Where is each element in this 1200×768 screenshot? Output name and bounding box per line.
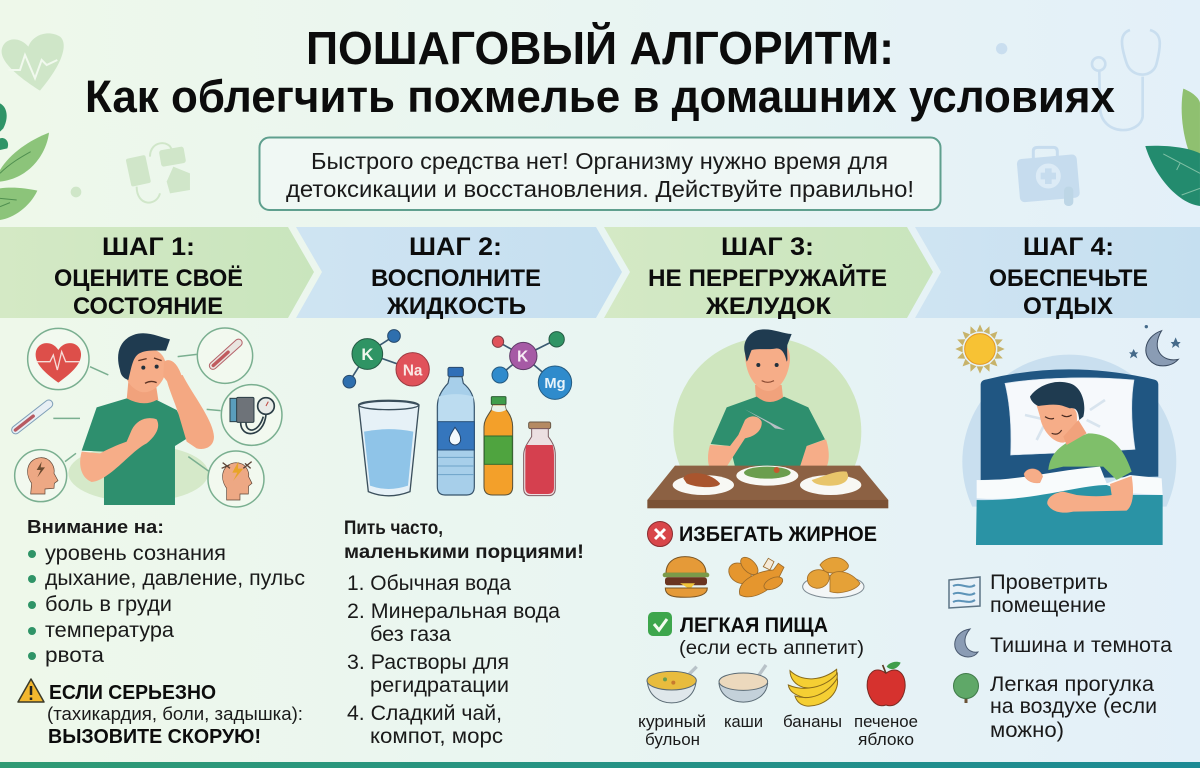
text: quiet and dark: Тишина и темнота [990, 634, 1172, 657]
icons: fatty foods [663, 554, 864, 598]
list: attention points: рвота [45, 644, 104, 667]
icon: molecule K Mg: K [517, 349, 528, 366]
heading: light food: ЛЕГКАЯ ПИЩА [680, 613, 828, 637]
drinking instructions: Пить часто, [344, 518, 443, 539]
table [647, 466, 888, 500]
text: light walk [990, 673, 1157, 742]
list: drinks: 4. Сладкий чай, [347, 702, 502, 725]
callout: Быстрого средства нет! Организму нужно время для [311, 148, 888, 174]
illustration: electrolytes and drinks [343, 330, 572, 496]
ribbon: step 4 [915, 227, 1200, 320]
heading: light food: (если есть аппетит) [679, 637, 864, 659]
list: attention points: уровень сознания [45, 542, 226, 565]
icon: faint first aid kit [1017, 147, 1080, 206]
ribbon: step 1 [0, 227, 314, 320]
icon: check mark [648, 612, 672, 636]
icon: large water bottle [437, 367, 474, 495]
drinking instructions: маленькими порциями! [344, 542, 584, 563]
icon: head left [15, 450, 67, 502]
ribbon: step 1: ОЦЕНИТЕ СВОЁ [54, 265, 243, 292]
porridge [719, 665, 768, 702]
icon: avoid cross [648, 522, 672, 546]
drinking instructions [344, 518, 584, 563]
warning text: (тахикардия, боли, задышка): [47, 704, 303, 724]
ribbon: step 2 [296, 227, 622, 320]
ribbon: step 3: НЕ ПЕРЕГРУЖАЙТЕ [648, 264, 887, 292]
text: light walk: Легкая прогулка [990, 673, 1154, 696]
food labels: куриный [638, 712, 706, 731]
icon: molecule K Mg: Mg [544, 376, 566, 392]
warning text: ВЫЗОВИТЕ СКОРУЮ! [48, 726, 261, 748]
ribbon: step 1: СОСТОЯНИЕ [73, 293, 223, 320]
bananas [788, 669, 838, 706]
icon: faint stethoscope [996, 30, 1160, 130]
icon: faint heart with pulse [2, 33, 64, 91]
list: drinks [347, 572, 560, 748]
text: ventilate: помещение [990, 594, 1106, 617]
text: ventilate: Проветрить [990, 571, 1108, 594]
food labels: бананы [783, 712, 842, 731]
icon: right leaves [1145, 89, 1200, 206]
food labels: яблоко [858, 730, 914, 749]
food labels: каши [724, 712, 763, 731]
list: drinks: 2. Минеральная вода [347, 600, 560, 623]
text: ventilate [990, 571, 1108, 617]
burger [663, 557, 709, 597]
title: ПОШАГОВЫЙ АЛГОРИТМ: [306, 22, 894, 74]
list: drinks: регидратации [370, 674, 509, 697]
plates [673, 475, 734, 495]
list: attention points: дыхание, давление, пульс [45, 567, 305, 590]
heading: avoid fatty food: ИЗБЕГАТЬ ЖИРНОЕ [679, 522, 877, 546]
icon: crescent moon [955, 629, 978, 657]
apple [867, 662, 905, 706]
icon: blood pressure cuff [221, 385, 282, 445]
list: attention points [27, 516, 305, 667]
ribbon: step 2: ВОСПОЛНИТЕ [371, 265, 541, 292]
ribbon: step 4: ОБЕСПЕЧЬТЕ [989, 265, 1148, 292]
icon: thermometer [197, 328, 253, 383]
icon: fresh air window [949, 577, 980, 608]
icon: molecule K Na [343, 330, 429, 388]
icon: warning triangle [18, 679, 44, 702]
icon: faint blood pressure monitor [126, 143, 190, 203]
fried nuggets [803, 557, 864, 598]
heading: light food [679, 613, 864, 659]
illustration: man eating at table [647, 329, 888, 526]
warning text [47, 682, 303, 748]
footer band [0, 762, 1200, 768]
ribbon: step 3: ЖЕЛУДОК [705, 293, 831, 320]
list: attention points: боль в груди [45, 593, 172, 616]
list: drinks: без газа [370, 623, 451, 646]
list: drinks: 3. Растворы для [347, 651, 509, 674]
icon: left leaves [0, 103, 81, 220]
icon: thermometer left [10, 398, 54, 435]
food labels: бульон [645, 730, 700, 749]
icon: sun [955, 324, 1005, 374]
ribbon: step 2: ЖИДКОСТЬ [386, 293, 526, 320]
list: drinks: 1. Обычная вода [347, 572, 511, 595]
ribbon: step 3: ШАГ 3: [721, 233, 814, 261]
icon: glass of water [359, 400, 419, 496]
ribbon: step 1: ШАГ 1: [102, 233, 195, 261]
ribbon: step 2: ШАГ 2: [409, 233, 502, 261]
chicken [725, 554, 785, 597]
ribbon: step 3 [604, 227, 933, 320]
icon: moon and stars [1129, 325, 1181, 366]
icon: tree [954, 674, 978, 703]
warning text: ЕСЛИ СЕРЬЕЗНО [49, 682, 216, 704]
callout: детоксикации и восстановления. Действуйте правильно! [286, 176, 914, 202]
food labels [638, 712, 918, 749]
icon: molecule K Mg [492, 332, 572, 399]
list: attention points: Внимание на: [27, 516, 164, 537]
food labels: печеное [854, 712, 918, 731]
icon: molecule K Na: Na [403, 362, 423, 379]
icon: molecule K Na: K [361, 345, 373, 364]
text: light walk: на воздухе (если [990, 695, 1157, 718]
list: drinks: компот, морс [370, 725, 503, 748]
list: attention points: температура [45, 619, 174, 642]
soup [647, 667, 697, 703]
text: light walk: можно) [990, 719, 1064, 742]
title [85, 22, 1115, 122]
title: Как облегчить похмелье в домашних условиях [85, 71, 1115, 122]
icon: heart [28, 328, 89, 390]
ribbon: step 4: ОТДЫХ [1023, 293, 1113, 320]
icons: light foods [647, 662, 905, 706]
icon: juice bottle [484, 397, 513, 495]
illustration: man sleeping in bed [955, 324, 1181, 569]
icon: red drink bottle [524, 422, 555, 496]
illustration: unwell man with symptom icons [10, 328, 282, 507]
icon: head right [208, 451, 264, 507]
ribbon: step 4: ШАГ 4: [1023, 233, 1114, 261]
callout [260, 138, 940, 210]
